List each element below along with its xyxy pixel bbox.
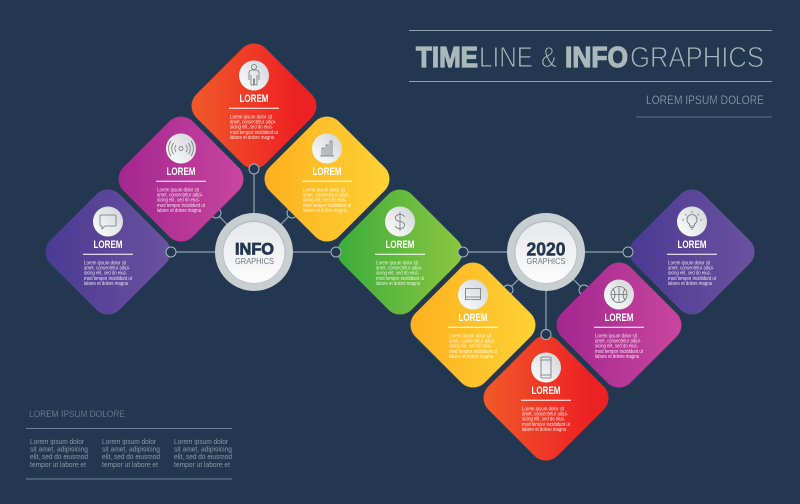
panel: purple right: LOREM: [678, 239, 706, 251]
panel: purple left: sicing elit, sed do eius-: [84, 271, 127, 277]
panel: red top: labore et dolore magna: [230, 135, 274, 141]
panel: magenta lower right: LOREM: [604, 312, 634, 324]
panel: magenta upper left: Lorem ipsum dolor sit: [157, 188, 199, 194]
footer text block: tempor ut labore et: [174, 462, 230, 469]
title block: &: [541, 42, 557, 74]
panel: red bottom: sicing elit, sed do eius-: [522, 417, 565, 423]
panel: yellow lower: Lorem ipsum dolor sit: [449, 334, 491, 340]
title block: INFO: [565, 42, 628, 74]
panel: purple left: mod tempor incididunt ut: [84, 276, 132, 282]
footer text block: Lorem ipsum dolor: [102, 439, 157, 446]
subtitle: LOREM IPSUM DOLORE: [646, 93, 764, 107]
panel: magenta lower right: mod tempor incididunt ut: [595, 349, 643, 355]
panel: yellow lower: labore et dolore magna: [449, 354, 493, 360]
footer text block: tempor ut labore et: [30, 462, 86, 469]
panel: magenta lower right: Lorem ipsum dolor sit: [595, 334, 637, 340]
panel: yellow lower: amet, consectetur adipi-: [449, 339, 495, 345]
panel: green centre: labore et dolore magna: [376, 281, 420, 287]
title block: GRAPHICS: [630, 42, 764, 74]
panel: yellow upper: sicing elit, sed do eius-: [303, 198, 346, 204]
footer text block: sit amet, adipisicing: [30, 447, 88, 454]
panel: red top: [191, 43, 317, 169]
hub: 2020 graphics: [507, 213, 585, 291]
footer text block: LOREM IPSUM DOLORE: [29, 409, 125, 420]
panel: purple left: [45, 189, 171, 315]
panel: red bottom: labore et dolore magna: [522, 427, 566, 433]
icon: person: [249, 64, 259, 85]
panel: green centre: sicing elit, sed do eius-: [376, 271, 419, 277]
panel: yellow upper: amet, consectetur adipi-: [303, 193, 349, 199]
icon: tablet: [466, 288, 480, 300]
title block: [409, 30, 772, 82]
panel: red bottom: LOREM: [532, 385, 560, 397]
icon: basketball: [611, 286, 627, 302]
icon: bar chart: [320, 141, 334, 156]
panel: yellow upper: [264, 116, 390, 242]
icon: dollar: [396, 212, 404, 231]
panel: purple left: LOREM: [94, 239, 122, 251]
panel: magenta upper left: sicing elit, sed do eius-: [157, 198, 200, 204]
hub: info graphics: [215, 213, 293, 291]
footer text block: elit, sed do eiusmod: [102, 454, 160, 461]
title block: LINE: [479, 42, 533, 74]
icon: light bulb: [682, 211, 702, 229]
panel: red top: sicing elit, sed do eius-: [230, 125, 273, 131]
panel: purple right: mod tempor incididunt ut: [668, 276, 716, 282]
panel: red top: Lorem ipsum dolor sit: [230, 114, 272, 120]
panel: yellow lower: sicing elit, sed do eius-: [449, 344, 492, 350]
footer text block: tempor ut labore et: [102, 462, 158, 469]
panel: red bottom: [483, 335, 609, 461]
panel: red bottom: amet, consectetur adipi-: [522, 412, 568, 418]
panel: purple left: Lorem ipsum dolor sit: [84, 260, 126, 266]
panel: yellow lower: LOREM: [458, 312, 488, 324]
panel: red top: LOREM: [240, 93, 268, 105]
panel: magenta upper left: LOREM: [166, 166, 196, 178]
footer text block: elit, sed do eiusmod: [30, 454, 88, 461]
panel: purple right: Lorem ipsum dolor sit: [668, 260, 710, 266]
footer text block: [26, 409, 232, 479]
connectors: [171, 169, 628, 334]
hub: info graphics: GRAPHICS: [235, 257, 274, 266]
panel: magenta lower right: amet, consectetur adipi-: [595, 339, 641, 345]
panel: magenta upper left: [118, 116, 244, 242]
footer text block: sit amet, adipisicing: [174, 447, 232, 454]
hub: 2020 graphics: GRAPHICS: [526, 257, 566, 266]
panel: red top: amet, consectetur adipi-: [230, 120, 276, 126]
panel: purple right: labore et dolore magna: [668, 281, 712, 287]
panel: red bottom: Lorem ipsum dolor sit: [522, 406, 564, 412]
title block: TIME: [416, 42, 478, 74]
panel: green centre: Lorem ipsum dolor sit: [376, 260, 418, 266]
panel: red bottom: mod tempor incididunt ut: [522, 422, 570, 428]
panel: purple left: labore et dolore magna: [84, 281, 128, 287]
footer text block: elit, sed do eiusmod: [174, 454, 232, 461]
panel: purple right: amet, consectetur adipi-: [668, 266, 714, 272]
panel: yellow upper: labore et dolore magna: [303, 208, 347, 214]
hub: 2020 graphics: 2020: [526, 238, 566, 260]
subtitle: [636, 93, 772, 117]
footer text block: Lorem ipsum dolor: [174, 439, 229, 446]
panel: purple right: sicing elit, sed do eius-: [668, 271, 711, 277]
panel: magenta upper left: mod tempor incididunt ut: [157, 203, 205, 209]
panel: purple left: amet, consectetur adipi-: [84, 266, 130, 272]
panel: yellow lower: [410, 262, 536, 388]
panel: yellow upper: mod tempor incididunt ut: [303, 203, 351, 209]
hub: info graphics: INFO: [235, 240, 274, 258]
panel: green centre: LOREM: [386, 239, 414, 251]
icon: smartphone: [541, 357, 551, 378]
panel: yellow upper: LOREM: [312, 166, 342, 178]
panel: purple right: [629, 189, 755, 315]
panel: green centre: [337, 189, 463, 315]
panel: yellow lower: mod tempor incididunt ut: [449, 349, 497, 355]
panel: magenta lower right: sicing elit, sed do eius-: [595, 344, 638, 350]
panel: magenta upper left: amet, consectetur adipi-: [157, 193, 203, 199]
footer text block: Lorem ipsum dolor: [30, 439, 85, 446]
panel: magenta lower right: labore et dolore magna: [595, 354, 639, 360]
connector nodes: [166, 164, 633, 340]
panel: magenta upper left: labore et dolore magna: [157, 208, 201, 214]
panel: yellow upper: Lorem ipsum dolor sit: [303, 188, 345, 194]
panel: red top: mod tempor incididunt ut: [230, 130, 278, 136]
panel: green centre: amet, consectetur adipi-: [376, 266, 422, 272]
icon: signal rings: [169, 141, 193, 156]
panel: green centre: mod tempor incididunt ut: [376, 276, 424, 282]
icon: speech bubble: [100, 215, 116, 229]
panel: magenta lower right: [556, 262, 682, 388]
footer text block: sit amet, adipisicing: [102, 447, 160, 454]
